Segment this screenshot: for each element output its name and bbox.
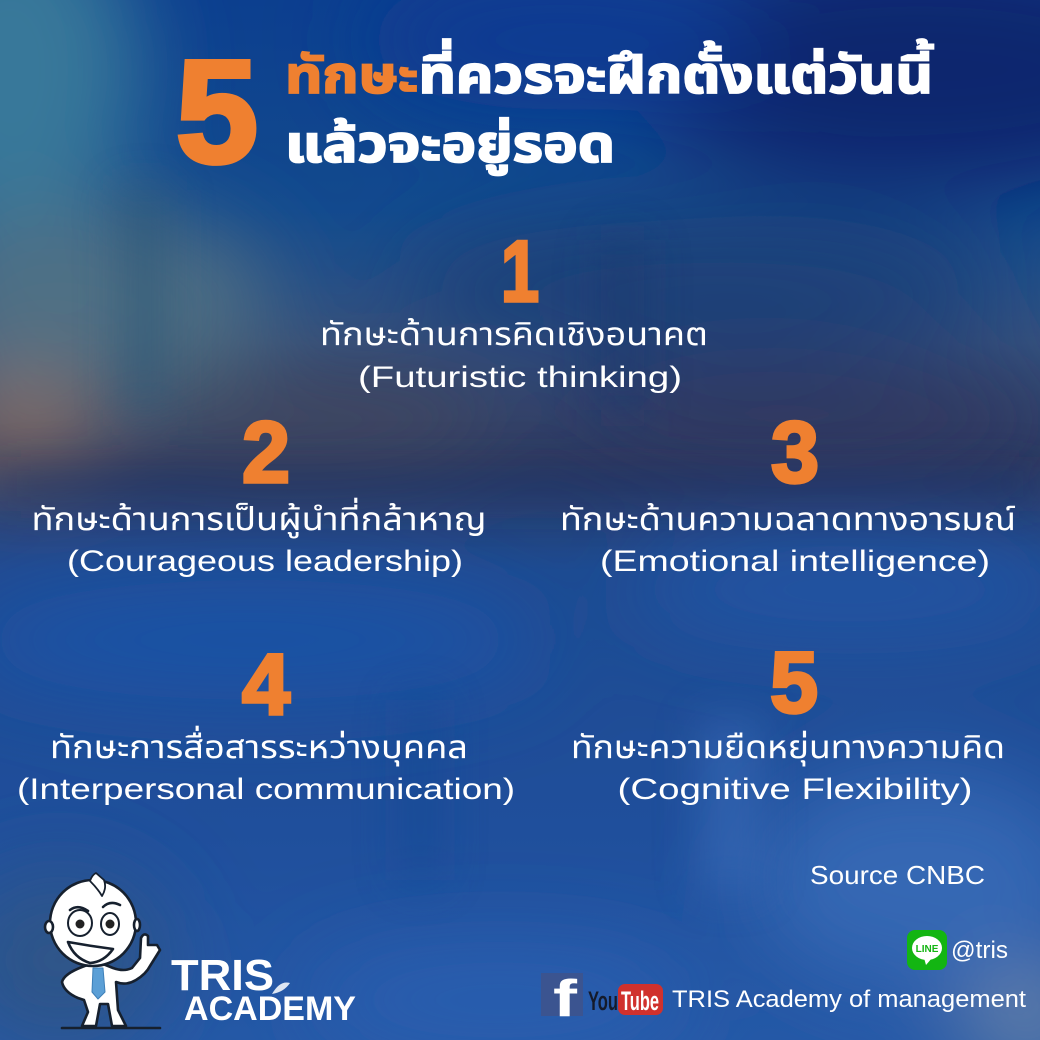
title line 2: แล้วจะอยู่รอด bbox=[285, 116, 615, 176]
icon: LINE bbox=[907, 930, 947, 970]
skill 4 bbox=[17, 637, 515, 806]
social account name: TRIS Academy of management bbox=[672, 986, 1026, 1013]
skill 3 bbox=[560, 405, 1016, 578]
skill 4: (Interpersonal communication) bbox=[17, 773, 515, 806]
skill 2 bbox=[32, 405, 486, 578]
skill 1 bbox=[320, 224, 708, 394]
title line 1: ทักษะ ที่ควรจะฝึกตั้งแต่วันนี้ bbox=[285, 39, 934, 105]
skill 1: ทักษะด้านการคิดเชิงอนาคต bbox=[320, 316, 708, 352]
logo: TRIS Academy: TRIS bbox=[171, 951, 274, 1000]
skill 2: (Courageous leadership) bbox=[67, 545, 463, 578]
skill 1: 1 bbox=[501, 224, 539, 320]
skill 4: ทักษะการสื่อสารระหว่างบุคคล bbox=[50, 725, 468, 766]
title bbox=[176, 30, 934, 193]
skill 3: ทักษะด้านความฉลาดทางอารมณ์ bbox=[560, 501, 1016, 537]
icon: YouTube: Tube bbox=[621, 986, 659, 1016]
skill 2: ทักษะด้านการเป็นผู้นำที่กล้าหาญ bbox=[32, 497, 486, 539]
icon: Facebook bbox=[541, 970, 583, 1028]
icon: YouTube: You bbox=[588, 986, 618, 1016]
skill 5 bbox=[571, 635, 1005, 806]
logo: TRIS Academy bbox=[171, 951, 356, 1028]
skill 5: (Cognitive Flexibility) bbox=[618, 773, 972, 806]
skill 4: 4 bbox=[242, 637, 290, 733]
source note: Source CNBC bbox=[810, 860, 985, 890]
icon: YouTube bbox=[588, 984, 663, 1016]
skill 1: (Futuristic thinking) bbox=[358, 361, 682, 394]
big number 5: 5 bbox=[176, 30, 258, 193]
skill 3: 3 bbox=[771, 405, 819, 501]
skill 3: (Emotional intelligence) bbox=[600, 545, 990, 578]
skill 5: ทักษะความยืดหยุ่นทางความคิด bbox=[571, 729, 1005, 766]
logo: TRIS Academy: ACADEMY bbox=[184, 990, 356, 1028]
skill 2: 2 bbox=[242, 405, 290, 501]
icon: Facebook: f bbox=[553, 970, 578, 1028]
icon: cartoon mascot bbox=[45, 873, 160, 1028]
LINE handle: @tris bbox=[951, 937, 1008, 964]
skill 5: 5 bbox=[770, 635, 818, 731]
icon: LINE: LINE bbox=[916, 944, 939, 955]
